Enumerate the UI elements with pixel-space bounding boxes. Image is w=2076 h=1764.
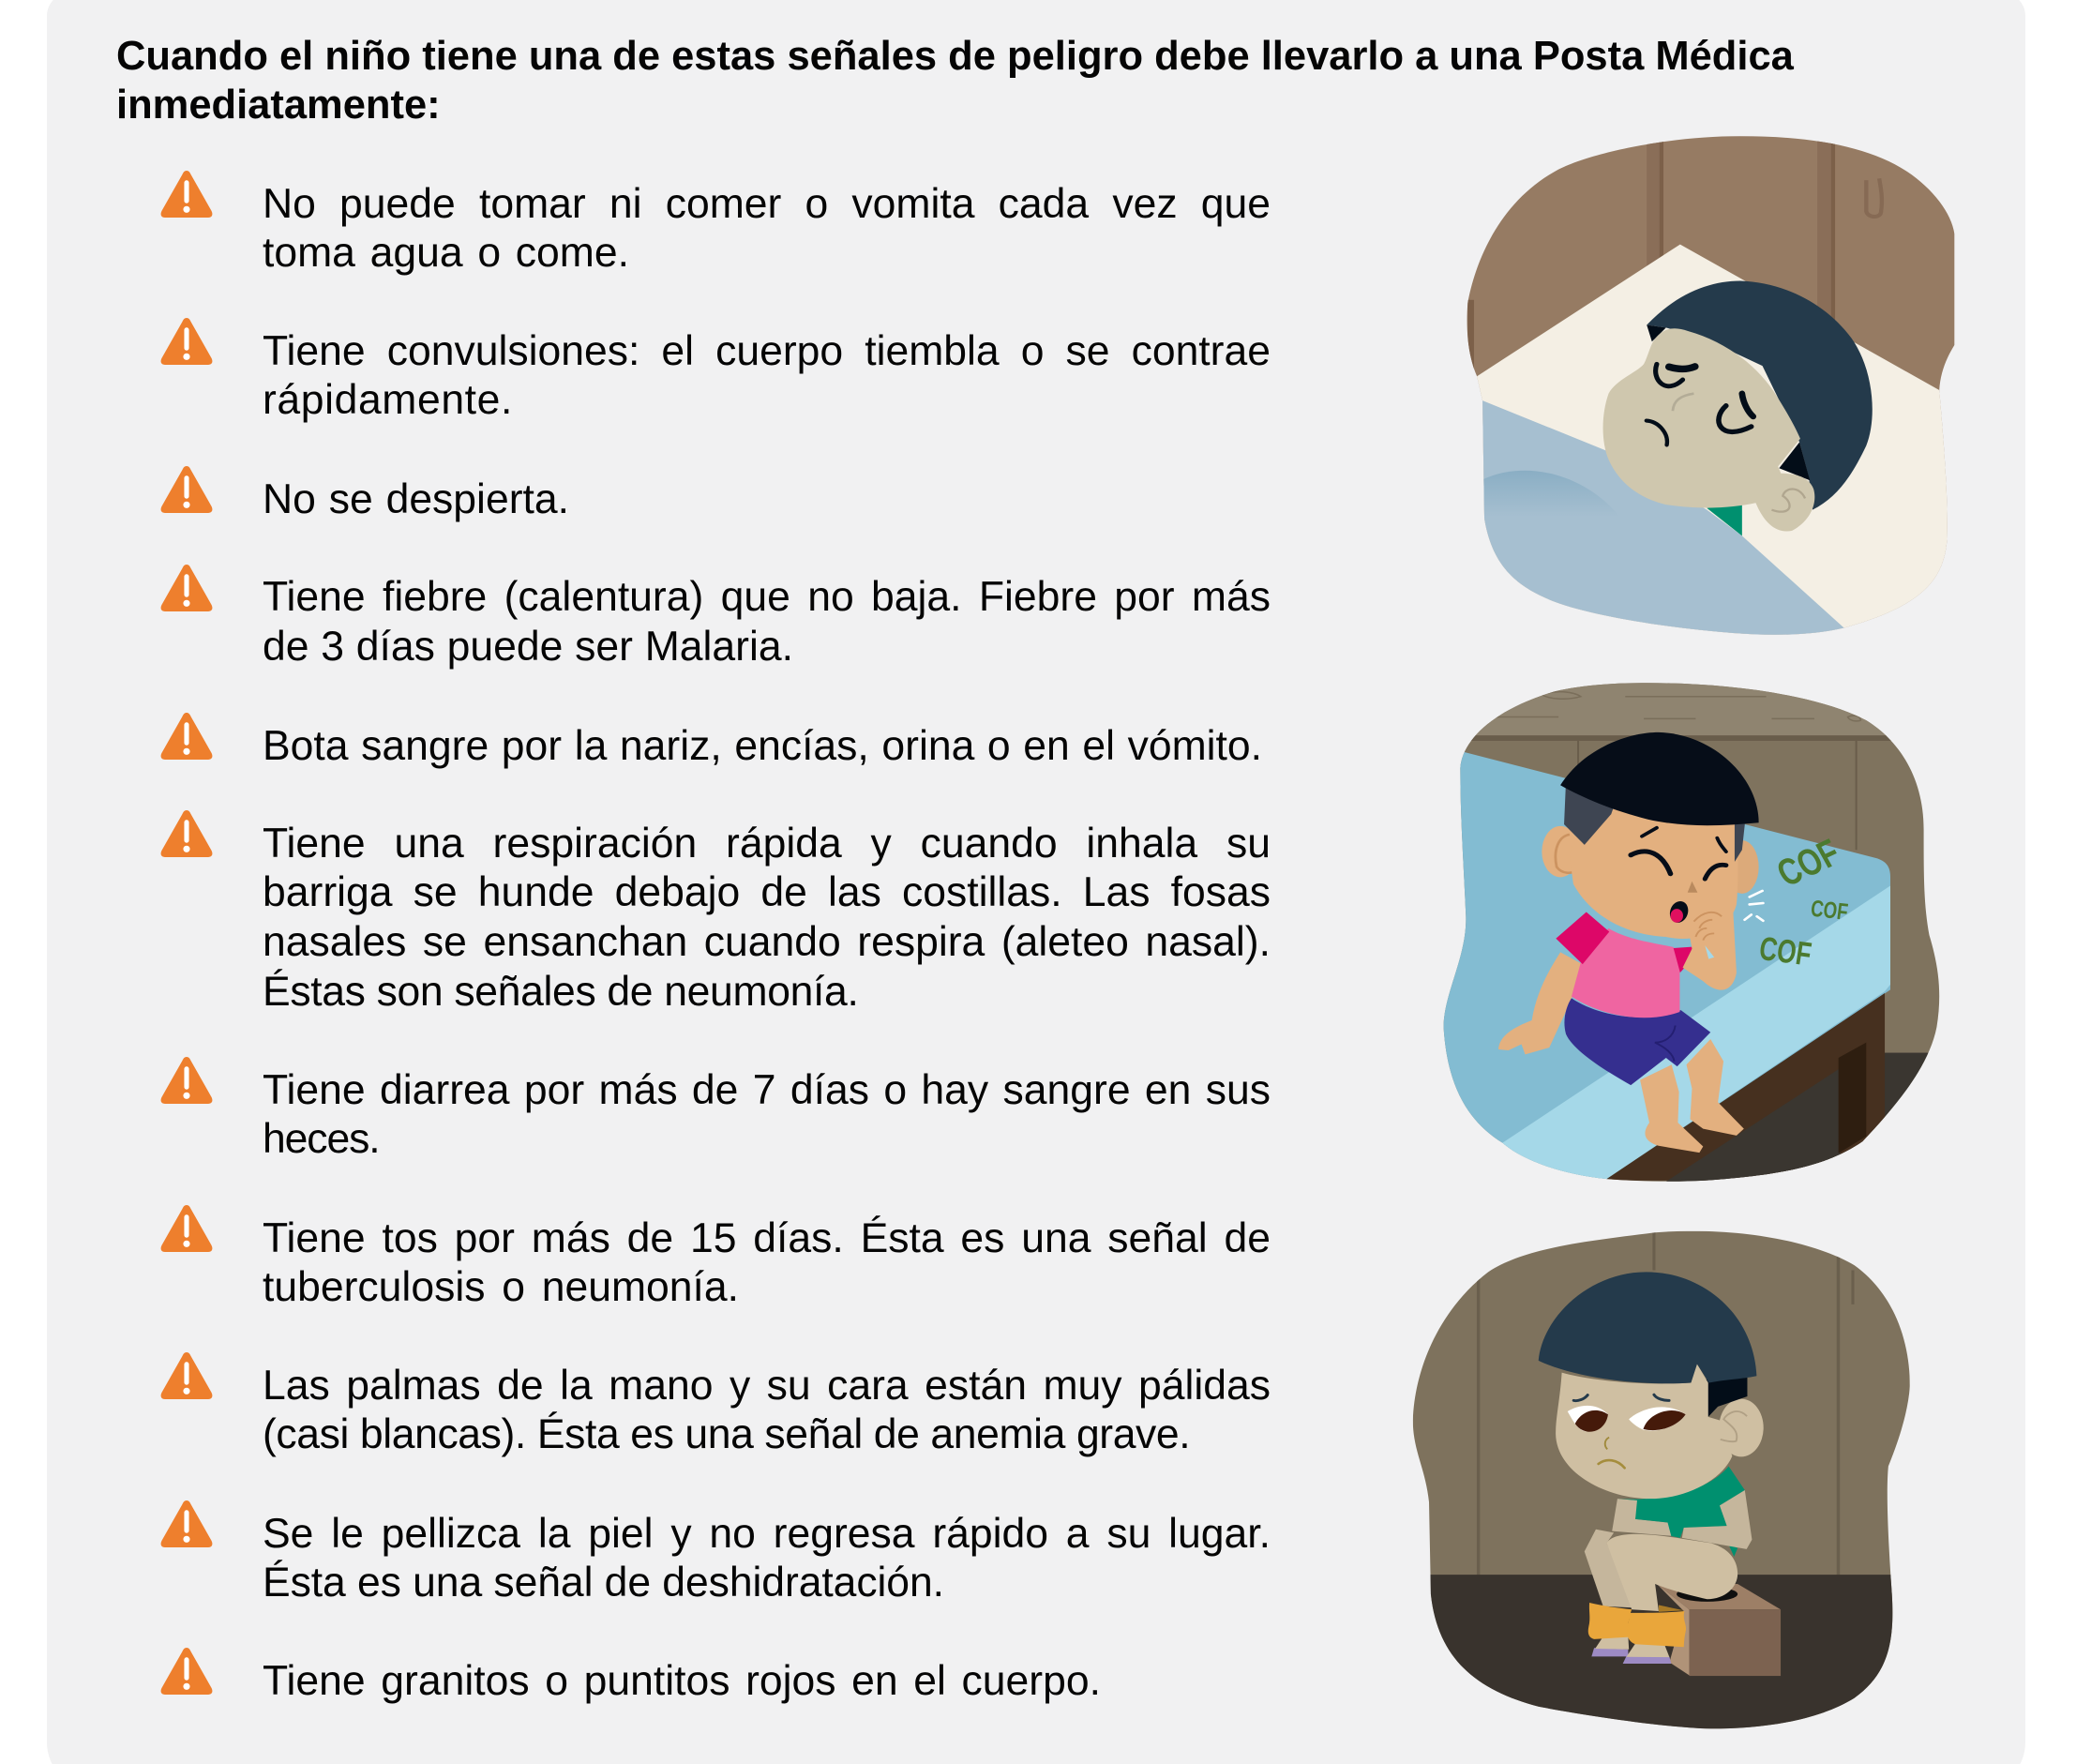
text bbox=[263, 1067, 1271, 1162]
list item: deshidratación bbox=[161, 1500, 1271, 1606]
hair bbox=[1539, 1272, 1756, 1383]
icon: warning triangle bbox=[161, 1205, 212, 1252]
legs bbox=[1640, 1064, 1703, 1153]
shirt bbox=[1572, 928, 1679, 1018]
ears bbox=[1725, 840, 1759, 894]
cough words bbox=[1757, 832, 1849, 973]
text: Tiene fiebre (calentura) que no baja. Fiebre por más bbox=[263, 574, 1271, 620]
text bbox=[263, 180, 1271, 276]
title: Cuando el niño tiene una de estas señales de peligro debe llevarlo a una Posta Médica bbox=[116, 34, 1794, 79]
text bbox=[263, 1510, 1271, 1606]
text: tuberculosis o neumonía. bbox=[263, 1264, 739, 1310]
text: rápidamente. bbox=[263, 377, 513, 423]
text: Éstas son señales de neumonía. bbox=[263, 969, 858, 1015]
text bbox=[263, 1215, 1271, 1310]
hair bbox=[1564, 782, 1617, 845]
icon: warning triangle bbox=[161, 565, 212, 611]
text: (casi blancas). Ésta es una señal de anemia grave. bbox=[263, 1411, 1190, 1457]
back leg bbox=[1585, 1530, 1633, 1607]
icon: warning triangle bbox=[161, 810, 212, 857]
text: barriga se hunde debajo de las costillas. Las fosas bbox=[263, 869, 1271, 915]
text: No puede tomar ni comer o vomita cada vez que bbox=[263, 180, 1271, 227]
list item: sangre bbox=[161, 713, 1262, 769]
list item: neumonía bbox=[161, 810, 1271, 1015]
text: Tiene granitos o puntitos rojos en el cuerpo. bbox=[263, 1658, 1101, 1703]
text: Tiene convulsiones: el cuerpo tiembla o se contrae bbox=[263, 328, 1271, 373]
icon: warning triangle bbox=[161, 466, 212, 513]
icon: warning triangle bbox=[161, 1500, 212, 1547]
text: No se despierta. bbox=[263, 476, 569, 521]
box stool bbox=[1657, 1584, 1781, 1609]
ear bbox=[1719, 1399, 1764, 1456]
text: de 3 días puede ser Malaria. bbox=[263, 624, 793, 670]
arms and body bbox=[1612, 1499, 1675, 1536]
text bbox=[263, 820, 1271, 1015]
illustration: child coughing bbox=[1437, 676, 1963, 1189]
icon: warning triangle bbox=[161, 713, 212, 760]
list item: no se despierta bbox=[161, 466, 569, 521]
cough words: COF bbox=[1809, 896, 1849, 926]
text: Las palmas de la mano y su cara están muy pálidas bbox=[263, 1362, 1271, 1409]
list item: convulsiones bbox=[161, 318, 1271, 423]
text: Tiene diarrea por más de 7 días o hay sangre en sus bbox=[263, 1067, 1271, 1112]
text: nasales se ensanchan cuando respira (aleteo nasal). bbox=[263, 919, 1271, 965]
list item: granitos bbox=[161, 1648, 1101, 1703]
cough words: COF bbox=[1757, 930, 1813, 973]
icon: warning triangle bbox=[161, 1648, 212, 1695]
icon: warning triangle bbox=[161, 171, 212, 218]
list item: anemia bbox=[161, 1352, 1271, 1457]
soles and feet bbox=[1591, 1648, 1628, 1656]
text: Se le pellizca la piel y no regresa rápido a su lugar. bbox=[263, 1510, 1271, 1557]
features bbox=[1631, 828, 1726, 879]
cough words: COF bbox=[1770, 832, 1847, 895]
left arm bbox=[1498, 952, 1586, 1054]
eyes bbox=[1568, 1406, 1608, 1432]
list item: diarrea bbox=[161, 1057, 1271, 1162]
icon: warning triangle bbox=[161, 1352, 212, 1399]
illustration: pale child sitting bbox=[1406, 1226, 1926, 1739]
hair underside bbox=[1704, 1378, 1747, 1417]
title bbox=[116, 34, 1795, 128]
title: inmediatamente: bbox=[116, 83, 441, 128]
text bbox=[263, 574, 1271, 670]
front leg bbox=[1606, 1534, 1738, 1611]
orange socks bbox=[1659, 1605, 1684, 1612]
text: Bota sangre por la nariz, encías, orina o en el vómito. bbox=[263, 722, 1262, 769]
text: Tiene una respiración rápida y cuando inhala su bbox=[263, 820, 1271, 867]
text bbox=[263, 328, 1271, 423]
illustration: sick child lying in bed bbox=[1467, 136, 1954, 635]
icon: warning triangle bbox=[161, 1057, 212, 1104]
coughing arm and fist bbox=[1683, 904, 1737, 990]
list item: no puede tomar bbox=[161, 171, 1271, 276]
shorts bbox=[1564, 998, 1710, 1085]
text: toma agua o come. bbox=[263, 230, 629, 276]
list item: tos bbox=[161, 1205, 1271, 1310]
list item: fiebre bbox=[161, 565, 1271, 670]
icon: warning triangle bbox=[161, 318, 212, 365]
text: Tiene tos por más de 15 días. Ésta es una señal de bbox=[263, 1215, 1271, 1260]
text: Ésta es una señal de deshidratación. bbox=[263, 1560, 944, 1606]
text: heces. bbox=[263, 1116, 380, 1162]
face bbox=[1570, 809, 1738, 939]
text bbox=[263, 1362, 1271, 1457]
face bbox=[1556, 1364, 1732, 1499]
